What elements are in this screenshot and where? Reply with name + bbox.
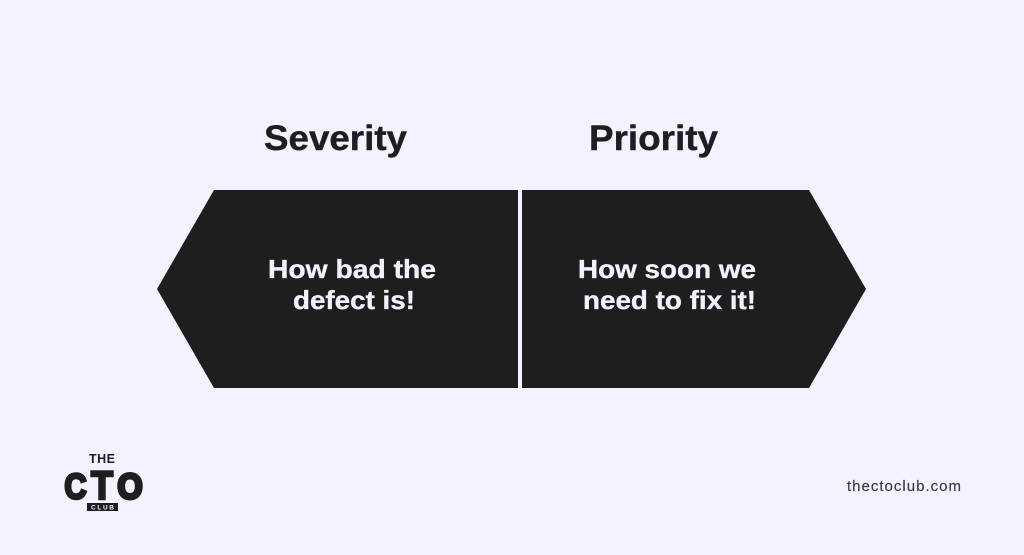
text: severity description: defect is!	[293, 285, 415, 315]
logo: The CTO Club: THE	[89, 452, 115, 466]
text: website: thectoclub.com	[847, 478, 961, 495]
text: priority description: need to fix it!	[583, 285, 756, 315]
panel: severity left-pointing arrow	[157, 190, 518, 388]
text: severity description: How bad the	[268, 254, 436, 284]
text: priority description: How soon we	[578, 254, 756, 284]
panel: priority right-pointing arrow	[522, 190, 866, 388]
logo: The CTO Club: T	[91, 464, 113, 508]
logo: The CTO Club: O	[118, 468, 142, 506]
text: severity description	[268, 254, 436, 315]
heading: Priority: Priority	[589, 119, 719, 158]
heading: Severity: Severity	[264, 119, 408, 158]
logo: The CTO Club	[64, 452, 142, 512]
logo: The CTO Club: CLUB	[91, 505, 114, 512]
logo: The CTO Club: C	[64, 468, 86, 506]
text: priority description	[578, 254, 756, 315]
